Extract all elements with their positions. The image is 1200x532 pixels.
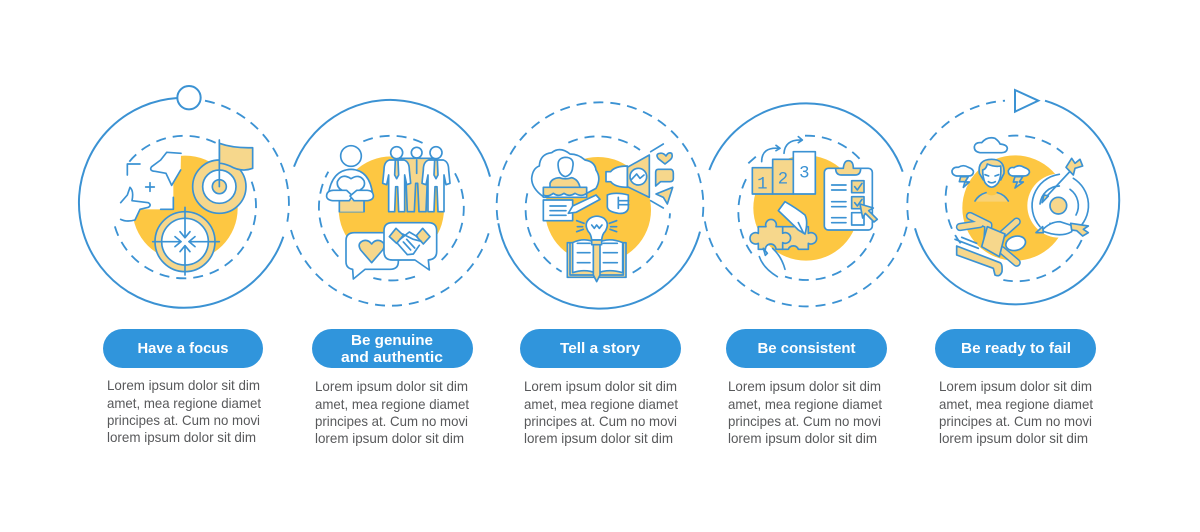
icon: light bulb with rays: [577, 216, 617, 240]
label pill: be genuine and authentic: Be genuine: [351, 332, 433, 349]
icon: note and pencil: [543, 195, 600, 221]
text block: column 2: [315, 378, 469, 446]
panel: be ready to fail: [907, 90, 1119, 304]
icon: target with flag: [193, 140, 253, 213]
icon: puzzle and hands: [750, 202, 817, 277]
panel: tell a story: [497, 102, 703, 309]
outer ring with start marker: [79, 86, 289, 308]
icon: open book: [567, 240, 626, 282]
panel: have a focus: [79, 86, 289, 308]
outer ring: [705, 103, 907, 306]
icon: person hugging heart: [327, 146, 373, 212]
outer ring with end marker: [907, 90, 1119, 304]
icon: framing hands: [121, 152, 181, 221]
label pill: be ready to fail: [935, 329, 1096, 368]
label pill: be consistent: Be consistent: [758, 340, 856, 357]
inner dashed ring: [113, 136, 256, 278]
label pill: have a focus: Have a focus: [138, 340, 228, 357]
icon: checklist clipboard: [824, 161, 877, 230]
text block: column 4: principes at. Cum no movi: [728, 413, 881, 429]
label pill: tell a story: Tell a story: [560, 340, 641, 357]
label pill: be consistent: [726, 329, 887, 368]
icon: heart, chat and paper plane: [656, 153, 673, 204]
label pill: be ready to fail: Be ready to fail: [961, 340, 1071, 357]
yellow disc: [339, 156, 444, 262]
text block: column 2: amet, mea regione diamet: [315, 396, 469, 412]
label pill: tell a story: [520, 329, 681, 368]
icon: person falling: [955, 216, 1027, 276]
text block: column 2: lorem ipsum dolor sit dim: [315, 430, 464, 446]
text block: column 4: Lorem ipsum dolor sit dim: [728, 378, 881, 394]
text block: column 1: lorem ipsum dolor sit dim: [107, 429, 256, 445]
text block: column 3: [524, 378, 678, 446]
text block: column 3: Lorem ipsum dolor sit dim: [524, 378, 677, 394]
icon: speech bubble with heart: [346, 233, 398, 279]
yellow disc: [962, 155, 1068, 261]
text block: column 5: lorem ipsum dolor sit dim: [939, 430, 1088, 446]
inner dashed ring: [526, 136, 670, 273]
text block: column 1: Lorem ipsum dolor sit dim: [107, 377, 260, 393]
text block: column 4: lorem ipsum dolor sit dim: [728, 430, 877, 446]
text block: column 1: [107, 377, 261, 445]
icon: megaphone: [606, 155, 649, 213]
text block: column 2: principes at. Cum no movi: [315, 413, 468, 429]
outer ring: [497, 102, 703, 309]
text block: column 1: amet, mea regione diamet: [107, 395, 261, 411]
outer ring: [291, 100, 490, 306]
text block: column 5: [939, 378, 1093, 446]
inner dashed ring: [319, 136, 464, 280]
label pill: be genuine and authentic: and authentic: [341, 349, 443, 366]
icon: speech bubble with handshake: [384, 223, 437, 270]
text block: column 1: principes at. Cum no movi: [107, 412, 260, 428]
text block: column 3: amet, mea regione diamet: [524, 396, 678, 412]
text block: column 2: Lorem ipsum dolor sit dim: [315, 378, 468, 394]
panel: be consistent: [705, 103, 907, 306]
icon: podium with ranks: 3: [799, 164, 810, 183]
panel: be genuine and authentic: [291, 100, 490, 306]
yellow disc: [545, 157, 651, 263]
label pill: have a focus: [103, 329, 263, 368]
inner dashed ring: [946, 136, 1082, 281]
label pill: be genuine and authentic: [312, 329, 473, 368]
icon: podium with ranks: [752, 137, 815, 195]
text block: column 3: principes at. Cum no movi: [524, 413, 677, 429]
icon: three business people: [383, 147, 450, 212]
text block: column 5: Lorem ipsum dolor sit dim: [939, 378, 1092, 394]
icon: calm person: [975, 159, 1008, 202]
inner dashed ring: [738, 136, 874, 280]
icon: podium with ranks: 1: [757, 176, 768, 195]
text block: column 5: principes at. Cum no movi: [939, 413, 1092, 429]
text block: column 4: amet, mea regione diamet: [728, 396, 882, 412]
text block: column 4: [728, 378, 882, 446]
yellow disc: [753, 155, 859, 261]
text block: column 3: lorem ipsum dolor sit dim: [524, 430, 673, 446]
icon: crosshair: [153, 207, 219, 275]
icon: clouds and lightning: [952, 138, 1029, 188]
yellow disc: [132, 156, 238, 261]
icon: podium with ranks: 2: [778, 170, 788, 189]
icon: target with missed arrows: [1027, 158, 1091, 238]
icon: thought cloud with speaker: [532, 150, 599, 197]
text block: column 5: amet, mea regione diamet: [939, 396, 1093, 412]
